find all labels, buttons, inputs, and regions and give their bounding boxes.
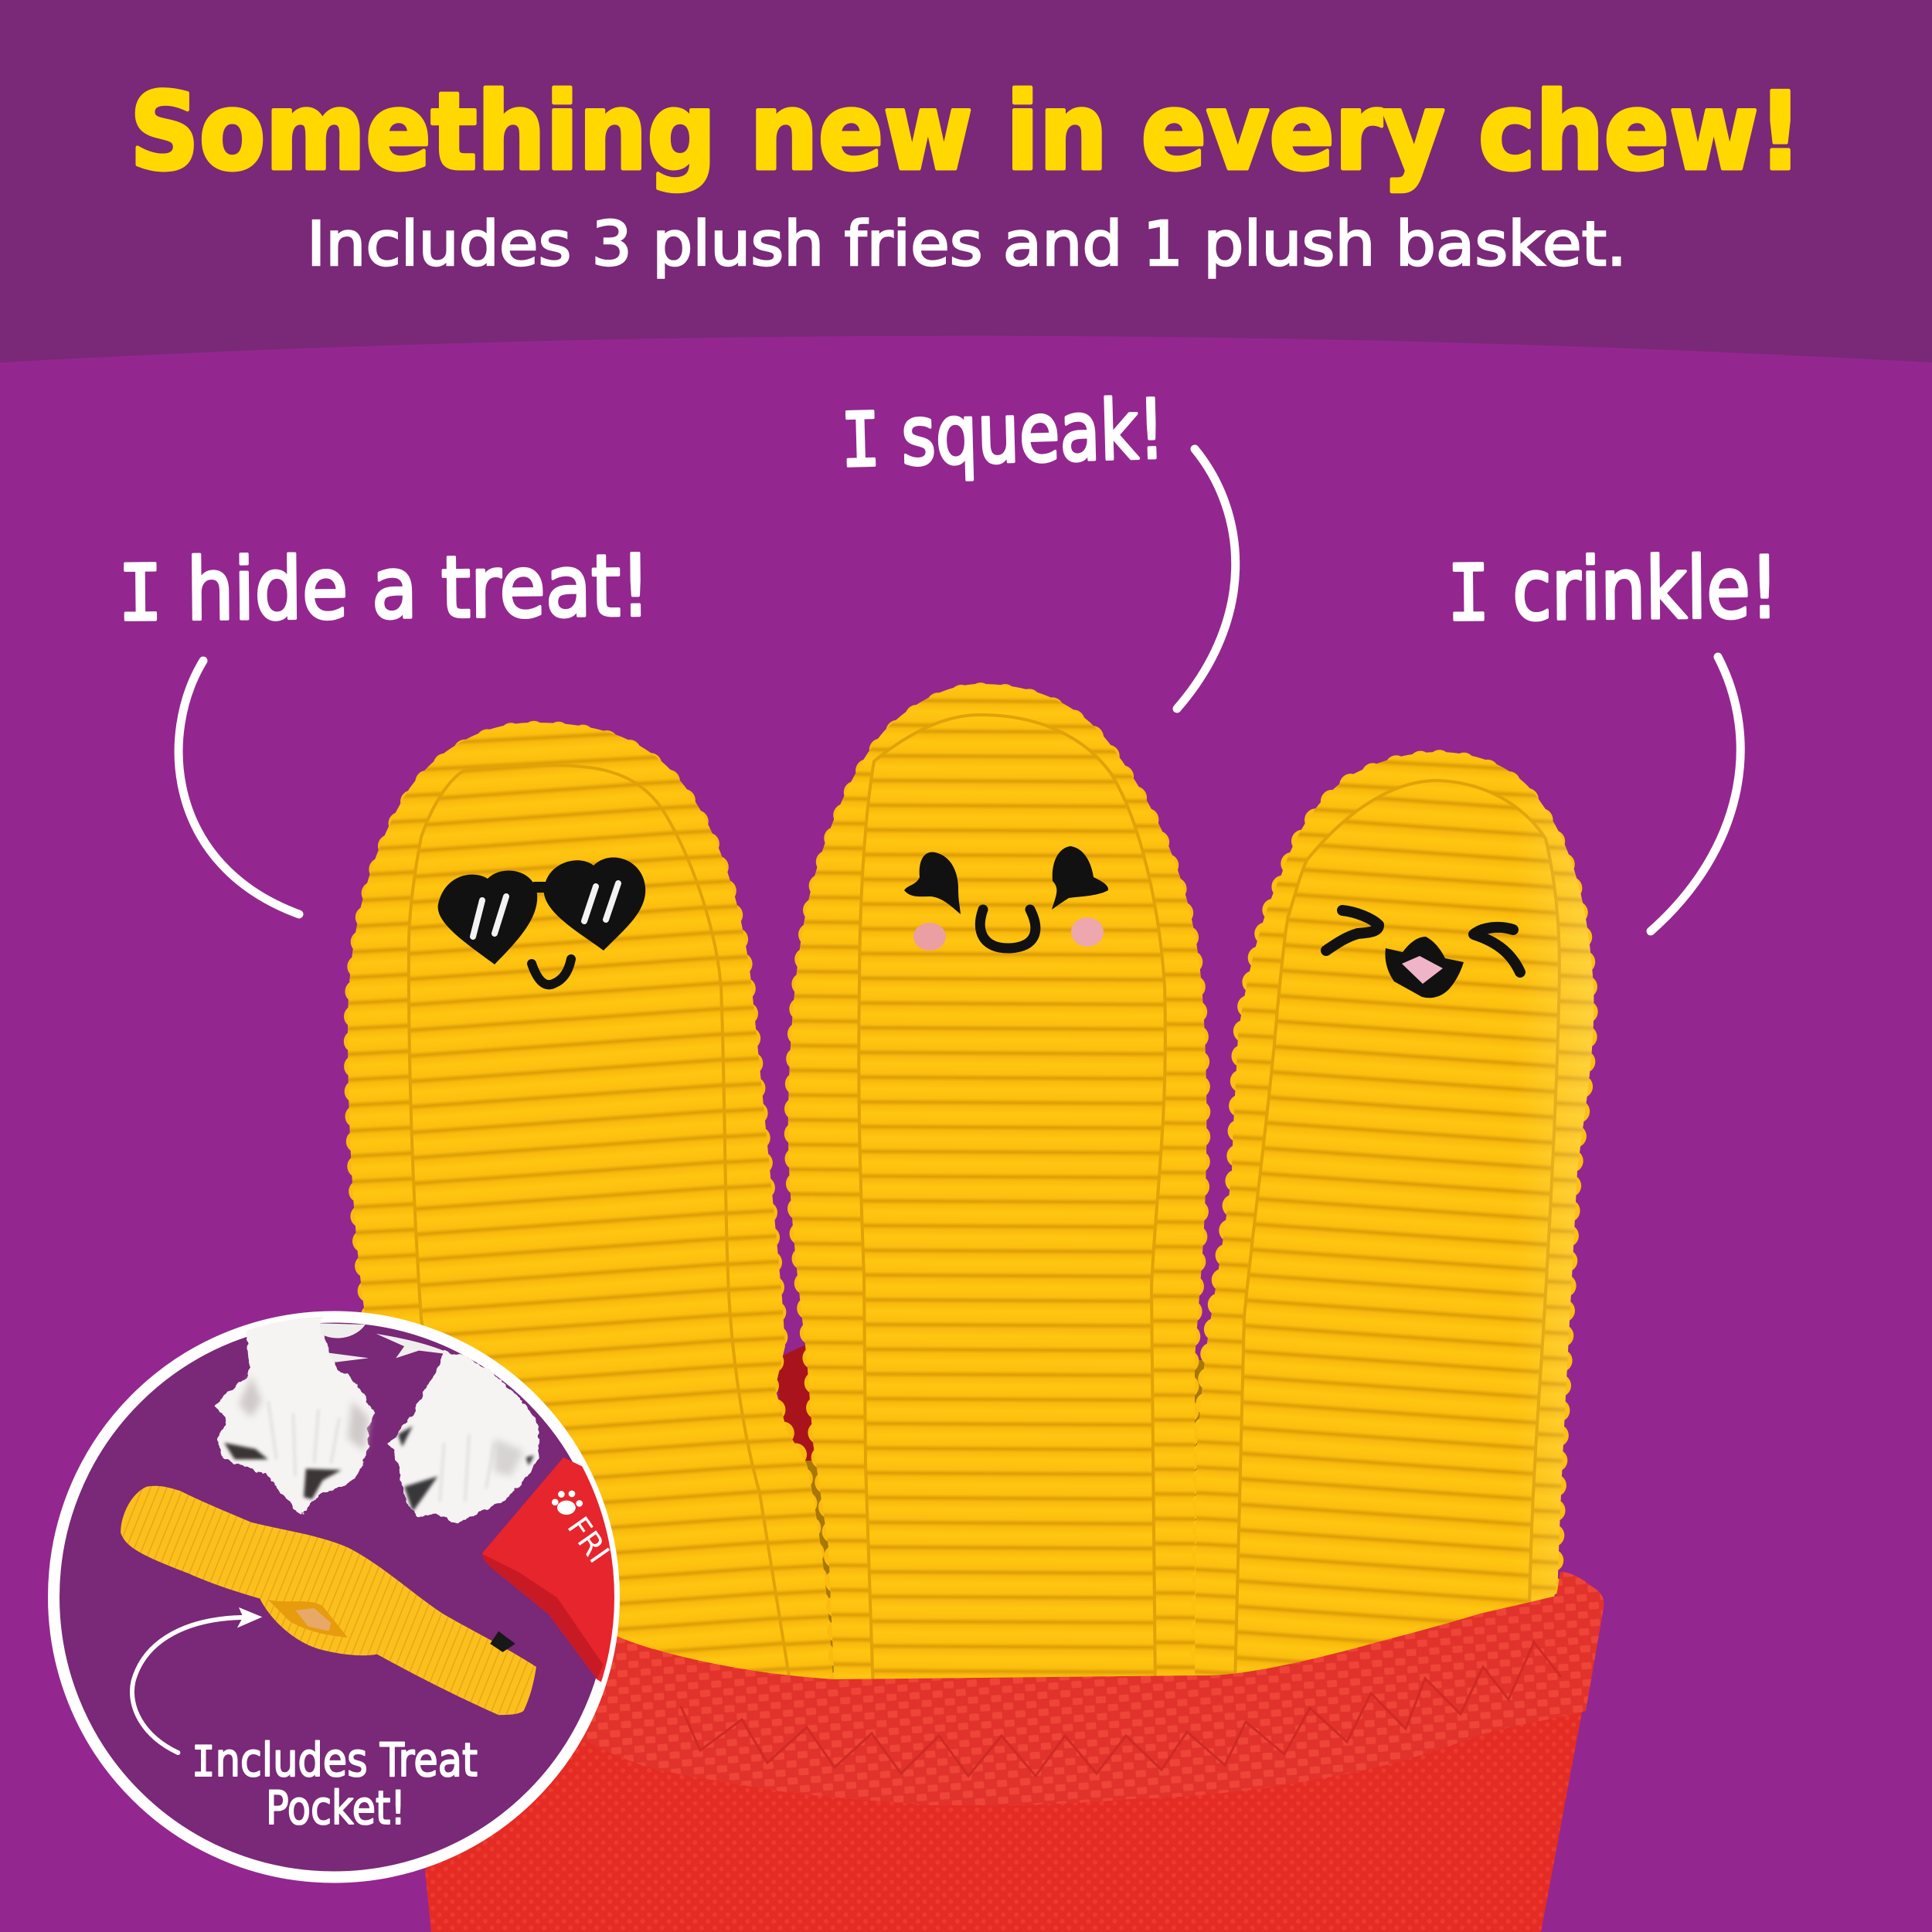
- paw print: [552, 1491, 583, 1515]
- paw: right: [387, 1352, 539, 1523]
- face: squinting eyes and open mouth: [1326, 910, 1520, 998]
- fry: right crinkle: [1195, 752, 1594, 1685]
- inset caption: [192, 1733, 478, 1835]
- fry: middle squeaker: [788, 684, 1206, 1692]
- callout: I hide a treat: I hide a treat!: [117, 536, 651, 646]
- shadows between fries: [796, 1360, 1217, 1685]
- face: winking eyes and smile: [904, 846, 1108, 951]
- paw fur wisps: [321, 1323, 452, 1362]
- fries group: [348, 684, 1594, 1692]
- curve: left callout: [179, 661, 299, 914]
- fry: left with sunglasses: [348, 723, 833, 1681]
- basket body: [425, 1708, 1583, 1932]
- inset caption: Includes Treat: [192, 1733, 478, 1791]
- inset circle: treat pocket: [54, 1317, 620, 1877]
- callout: I squeak: I squeak!: [839, 382, 1166, 491]
- inset photo content: [121, 1317, 620, 1753]
- inset caption: Pocket!: [266, 1781, 406, 1835]
- toy label: FRI: [560, 1511, 616, 1570]
- callout: I crinkle: I crinkle!: [1447, 538, 1779, 646]
- basket: [425, 1572, 1604, 1932]
- basket rim stitching: [681, 1642, 1561, 1776]
- paw: left: [215, 1317, 374, 1515]
- face: heart sunglasses: [438, 857, 645, 985]
- curve: middle callout: [1177, 449, 1236, 709]
- subtitle: Includes 3 plush fries and 1 plush basket.: [307, 209, 1627, 280]
- basket rim: [579, 1572, 1604, 1805]
- curve: right callout: [1651, 657, 1740, 931]
- basket back wall: [777, 1341, 850, 1468]
- header band: [0, 0, 1932, 362]
- arrow to pocket: [132, 1607, 262, 1753]
- small fry with pocket: [121, 1486, 536, 1715]
- title: Something new in every chew!: [130, 70, 1802, 194]
- red toy basket: [481, 1458, 620, 1694]
